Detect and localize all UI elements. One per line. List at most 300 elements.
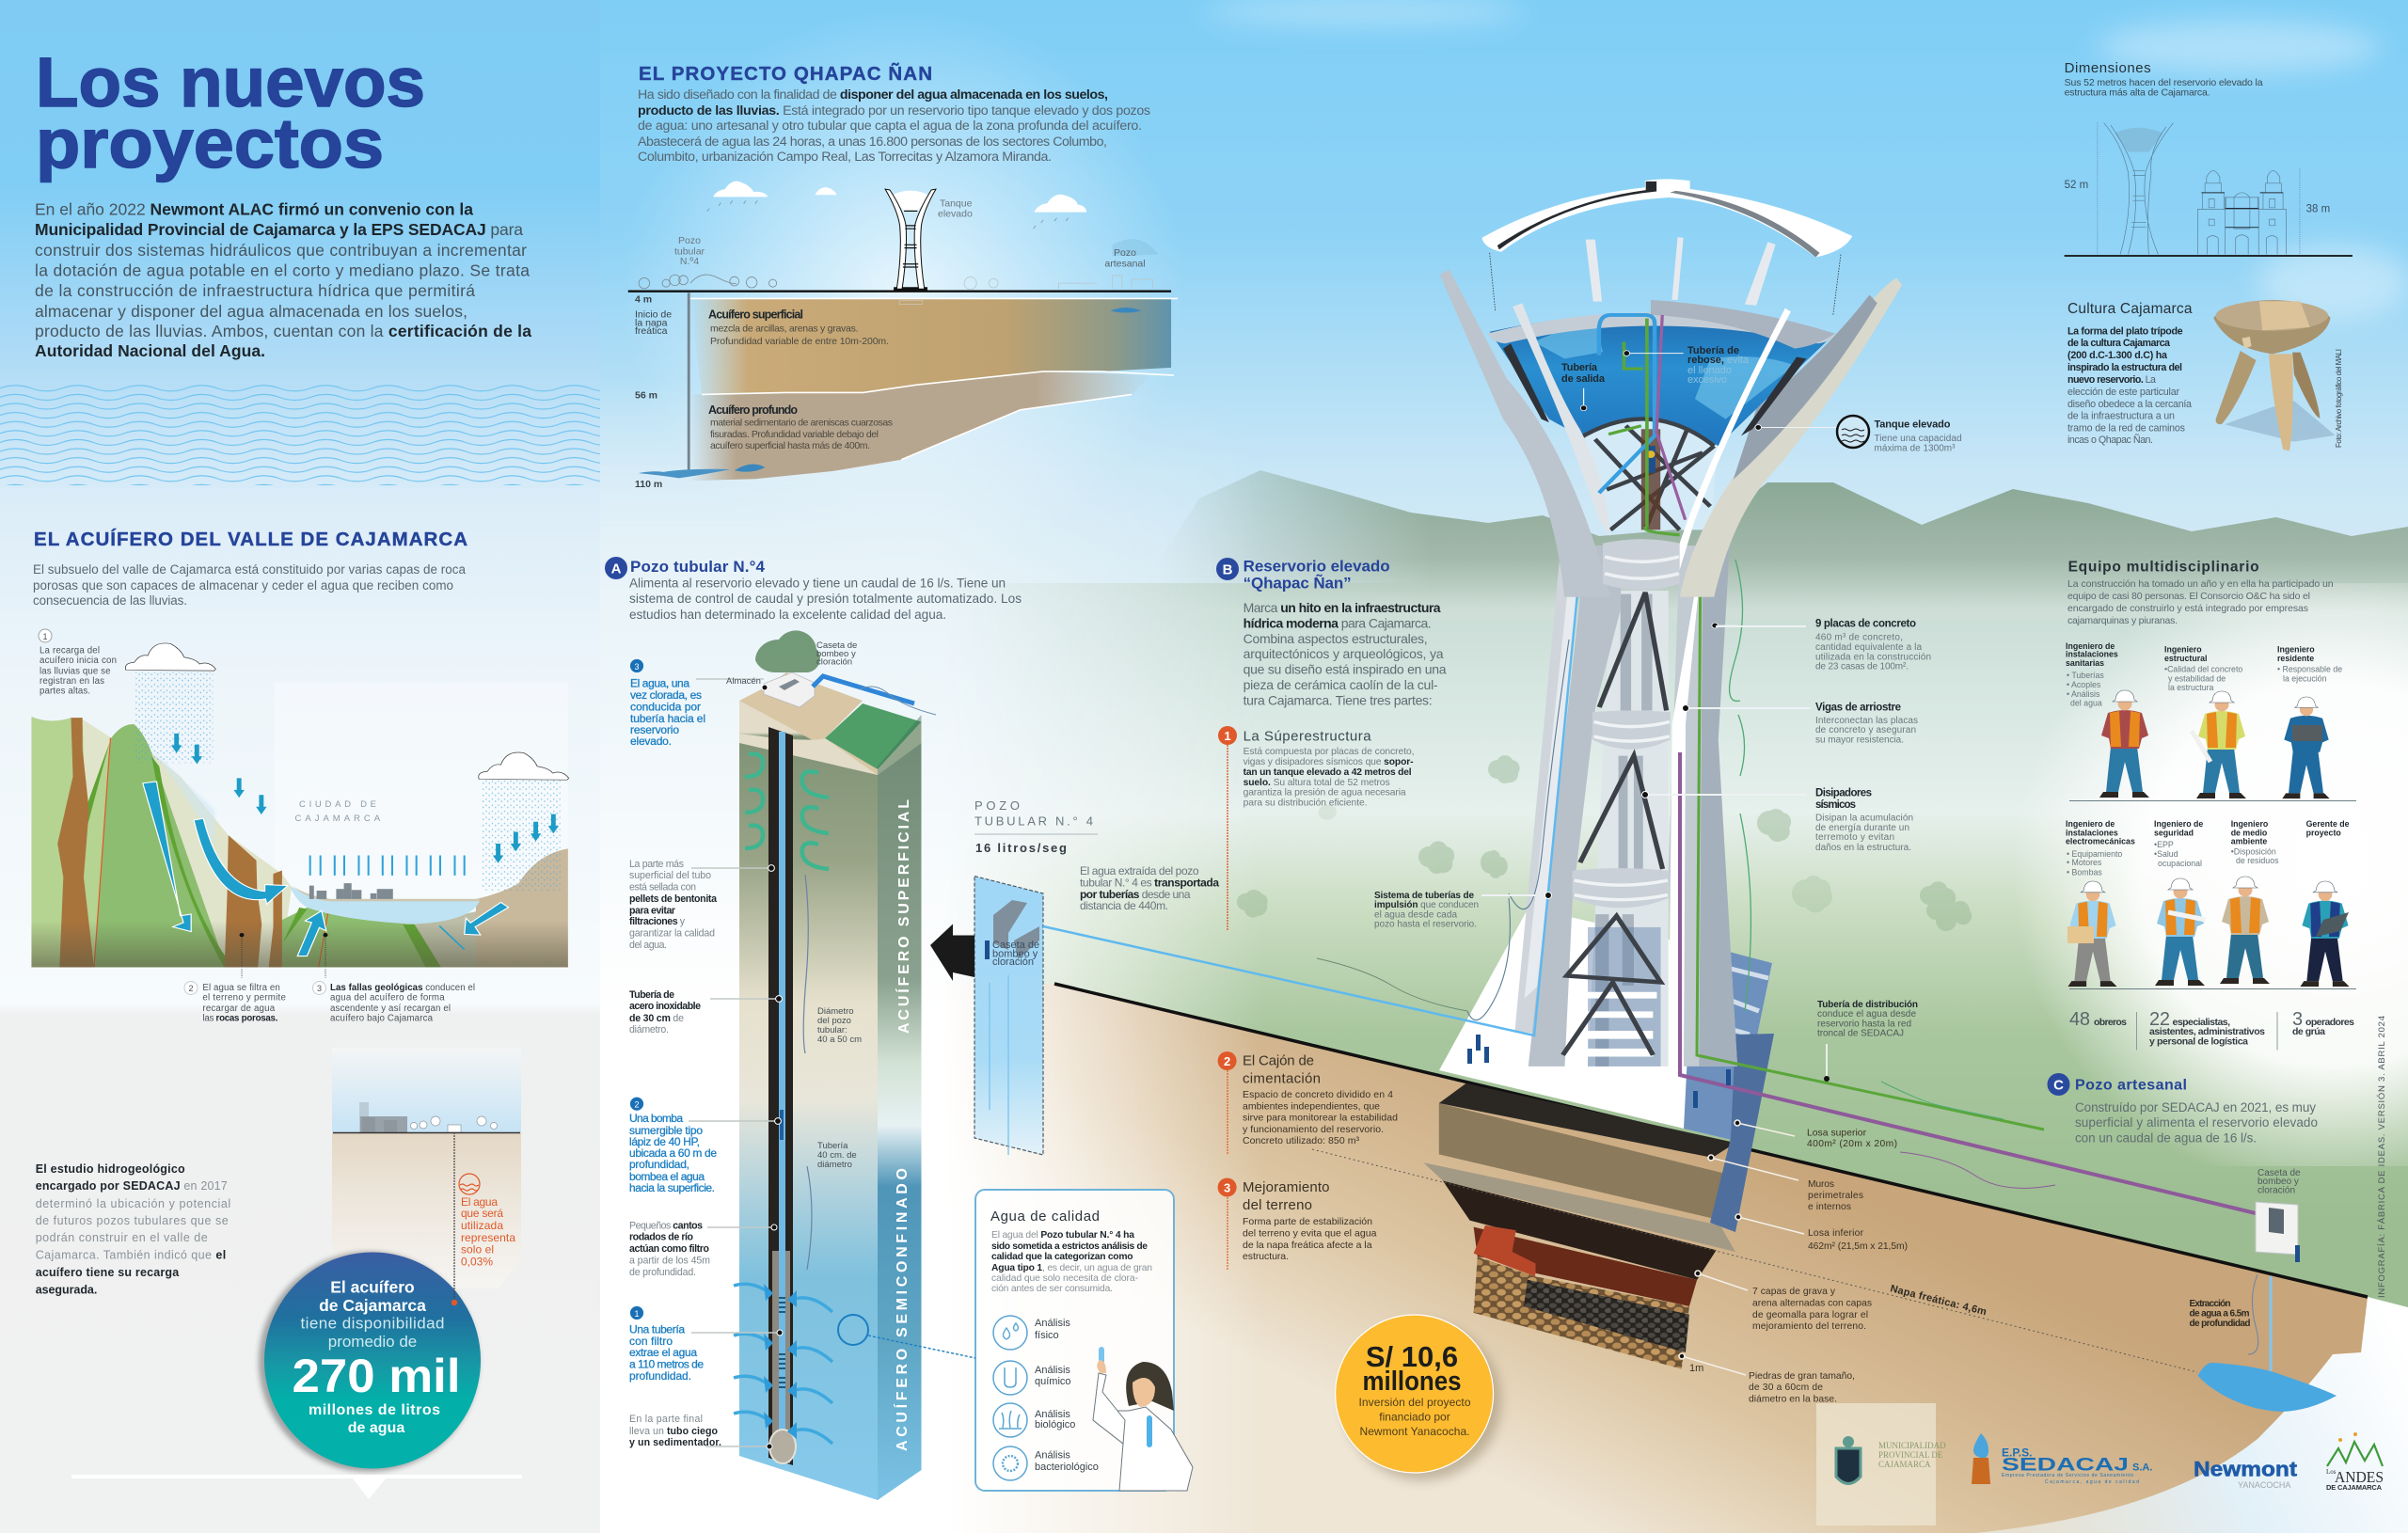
text block: introduction: Municipalidad Provincial de Cajamarca y la EPS SEDACAJ para xyxy=(35,220,523,239)
icon: análisis bacteriológico xyxy=(993,1446,1027,1480)
text block: pozo artesanal: con un caudal de agua de 16 l/s. xyxy=(2075,1130,2257,1146)
text block: introduction: producto de las lluvias. Ambos, cuentan con la certificación de la xyxy=(35,322,531,340)
note: step 2 blue: lápiz de 40 HP, xyxy=(629,1135,700,1148)
figure: ingeniero electromecánicas: • Motores xyxy=(2067,858,2102,867)
stat: 48 obreros: 48 xyxy=(2069,1009,2090,1030)
text: step 3: acuífero bajo Cajamarca xyxy=(330,1014,434,1023)
text block: pozo artesanal: superficial y alimenta el reservorio elevado xyxy=(2075,1115,2318,1130)
callout: tubería de distribución: troncal de SEDACAJ xyxy=(1817,1029,1904,1039)
label: pozo tubular xyxy=(674,235,705,267)
text block: pozo tubular description: sistema de control de caudal y presión totalmente automatizado. Los xyxy=(629,592,1022,606)
text block: pozo tubular description: Alimenta al reservorio elevado y tiene un caudal de 16 l/s. Tiene un xyxy=(629,577,1006,591)
callout: tubería de rebose: rebose, evita xyxy=(1687,355,1750,366)
text: step 2: recargar de agua xyxy=(202,1004,276,1014)
panel: agua de calidad: Agua tipo 1, es decir, un agua de gran xyxy=(991,1263,1152,1273)
callout: tubería de rebose: Tubería de xyxy=(1687,345,1739,356)
logo: sedacaj: Cajamarca, agua de calidad xyxy=(2045,1479,2139,1485)
panel: equipo multidisciplinario: cajamarquinas y piuranas. xyxy=(2067,615,2178,626)
figure: ingeniero de seguridad xyxy=(2154,819,2206,986)
logo: los andes de cajamarca: ANDES xyxy=(2335,1468,2384,1486)
callout: disipadores sísmicos: terremoto y evitan xyxy=(1815,832,1894,843)
photo credit: Foto: Archivo fotográfico del MALI xyxy=(2335,349,2343,448)
logo: sedacaj: SEDACAJ xyxy=(2002,1456,2129,1476)
figure: ingeniero residente: • Responsable de xyxy=(2277,665,2342,674)
illustration: foundation section xyxy=(1423,1083,1735,1369)
illustration: tank and roof xyxy=(1440,179,1902,628)
text: step 1: La recarga del xyxy=(40,646,100,656)
text block: introduction: de la construcción de infraestructura hídrica que permitirá xyxy=(35,281,475,300)
figure: ingeniero electromecánicas: • Equipamiento xyxy=(2067,849,2122,859)
stat: 22 especialistas: 22 xyxy=(2149,1009,2170,1030)
callout: tubería de distribución: reservorio hasta la red xyxy=(1817,1019,1911,1030)
panel: caseta detail card: cloración xyxy=(992,956,1034,968)
badge: step 2: 2 xyxy=(188,984,194,993)
icon: análisis químico xyxy=(993,1361,1027,1395)
depth scale: 110 m xyxy=(635,479,662,490)
text: análisis físico xyxy=(1035,1318,1070,1341)
background: sky and landscape xyxy=(600,0,2408,1533)
note: step 3 blue: tubería hacia el xyxy=(630,712,705,725)
stat: 22 especialistas xyxy=(2149,1009,2265,1047)
text block: introduction xyxy=(35,199,531,360)
text block: proyecto description: de agua: uno artesanal y otro tubular que capta el agua de la zona profunda del acuífero. xyxy=(638,119,1142,134)
layer: acuífero profundo: acuífero superficial hasta más de 400m. xyxy=(710,440,870,451)
logo: municipalidad xyxy=(1816,1403,1946,1525)
panel: agua de calidad: El agua del Pozo tubular N.° 4 ha xyxy=(991,1230,1134,1241)
text block: reservorio description: Combina aspectos estructurales, xyxy=(1244,631,1428,646)
label: tanque elevado: Tanque xyxy=(940,198,973,209)
text: análisis biológico xyxy=(1035,1409,1075,1430)
depth scale: freática xyxy=(635,325,668,337)
panel: dimensiones: 38 m xyxy=(2306,203,2330,214)
logo: newmont: Newmont xyxy=(2194,1458,2298,1481)
layer: acuífero superficial xyxy=(708,308,889,347)
note: stainless pipe: diámetro. xyxy=(629,1024,669,1035)
note: bentonita seal: garantizar la calidad xyxy=(629,928,715,940)
callout: 9 placas de concreto: 9 placas de concreto xyxy=(1815,619,1916,630)
note: sediment trap: En la parte final xyxy=(629,1414,703,1425)
stat: 22 especialistas: asistentes, administrativos xyxy=(2149,1026,2265,1037)
callout: inversión S/ 10,6 millones: millones xyxy=(1362,1367,1462,1397)
callout: vigas de arriostre: Interconectan las placas xyxy=(1815,716,1918,726)
figure: ingeniero de instalaciones sanitarias: del agua xyxy=(2070,698,2102,707)
callout: 0,03%: solo el xyxy=(461,1243,494,1256)
section: 2 el cajón de cimentación: ambientes independientes, que xyxy=(1243,1101,1380,1113)
note: step 3 blue: reservorio xyxy=(630,723,679,736)
callout: inversión S/ 10,6 millones xyxy=(1336,1315,1501,1480)
label: losa inferior: Losa inferior xyxy=(1808,1228,1864,1239)
label: pozo tubular flow: POZO xyxy=(974,798,1020,813)
panel: agua de calidad: Agua de calidad xyxy=(990,1209,1100,1225)
panel: agua de calidad xyxy=(838,1190,1193,1491)
diámetro del pozo: del pozo xyxy=(817,1016,851,1026)
panel: cultura cajamarca: diseño obedece a la cercanía xyxy=(2067,399,2192,410)
section: 1 la superestructura: para su distribución eficiente. xyxy=(1244,798,1368,809)
label: muros: e internos xyxy=(1808,1202,1851,1212)
figure: ingeniero de seguridad: ocupacional xyxy=(2158,859,2202,868)
text: step 1: registran en las xyxy=(40,676,104,687)
figure: ingeniero de instalaciones sanitarias: Ingeniero de xyxy=(2066,641,2115,651)
label: losa superior: 400m² (20m x 20m) xyxy=(1807,1139,1897,1149)
note: stainless pipe: Tubería de xyxy=(629,989,674,1001)
text block: introduction: construir dos sistemas hidráulicos que contribuyan a incrementar xyxy=(35,241,527,260)
label: piedras: de 30 a 60cm de xyxy=(1749,1383,1823,1393)
note: step 2 blue: hacia la superficie. xyxy=(629,1181,715,1194)
section: 1 la superestructura: La Súperestructura xyxy=(1244,728,1371,744)
text block: pozo tubular description xyxy=(629,577,1022,622)
label: extracción: Extracción xyxy=(2190,1299,2231,1309)
section: 1 la superestructura: 1 xyxy=(1224,729,1231,743)
icon: red water globe xyxy=(459,1174,480,1194)
note: bentonita seal: del agua. xyxy=(629,940,667,951)
label: 1m: 1m xyxy=(1689,1363,1703,1374)
callout: tubería de rebose: el llenado xyxy=(1687,365,1732,376)
panel: cultura cajamarca: nuevo reservorio. La xyxy=(2067,374,2156,386)
panel: equipo multidisciplinario: Equipo multidisciplinario xyxy=(2068,560,2259,576)
note: step 1 blue: con filtro xyxy=(629,1335,673,1348)
label: capas de grava: arena alternadas con capas xyxy=(1752,1298,1872,1309)
note: step 2 blue: ubicada a 60 m de xyxy=(629,1146,717,1160)
callout: disipadores sísmicos: daños en la estructura. xyxy=(1815,843,1911,853)
callout: 270 mil circle: promedio de xyxy=(328,1333,417,1351)
callout: vigas de arriostre xyxy=(1815,703,1918,746)
note: bentonita seal: La parte más xyxy=(629,859,684,870)
label: muros: Muros xyxy=(1808,1179,1834,1190)
callout: tubería de salida: de salida xyxy=(1561,373,1606,385)
label: losa superior xyxy=(1807,1128,1897,1149)
icon: análisis biológico xyxy=(993,1403,1027,1437)
figure: ingeniero de instalaciones sanitarias: • Acoples xyxy=(2067,680,2101,689)
callout: sistema de tuberías de impulsión: Sistema de tuberías de xyxy=(1374,891,1474,901)
text: step 1: las lluvias que se xyxy=(40,666,111,676)
layer: acuífero profundo: material sedimentario de areniscas cuarzosas xyxy=(710,418,893,429)
note: step 2 blue xyxy=(629,1098,717,1194)
section: 2 el cajón de cimentación: 2 xyxy=(1224,1054,1230,1068)
label: losa superior: Losa superior xyxy=(1807,1128,1867,1138)
title xyxy=(36,43,425,182)
chart: project cross-section with tower and aquifers xyxy=(628,182,1178,481)
label: piedras: Piedras de gran tamaño, xyxy=(1749,1371,1855,1382)
text: step 3: ascendente y así recargan el xyxy=(330,1004,451,1014)
panel: agua de calidad: sido sometida a estrictos análisis de xyxy=(991,1241,1148,1252)
callout lines xyxy=(689,679,779,1446)
note: step 3 blue: conducida por xyxy=(630,700,701,713)
logo: los andes de cajamarca xyxy=(2326,1432,2384,1492)
logo: sedacaj xyxy=(1972,1433,2152,1485)
figure: ingeniero estructural: •Calidad del concreto xyxy=(2164,665,2242,674)
section: 2 el cajón de cimentación xyxy=(1218,1051,1398,1270)
logo: municipalidad: CAJAMARCA xyxy=(1878,1460,1931,1469)
figure: ingeniero de instalaciones sanitarias: instalaciones xyxy=(2066,650,2118,659)
text: step 1: acuífero inicia con xyxy=(40,656,117,666)
note: river stones: actúan como filtro xyxy=(629,1243,710,1255)
note: river stones: rodados de río xyxy=(629,1232,694,1243)
pointers: shaft callouts xyxy=(1481,626,1811,899)
text block: acuífero description xyxy=(33,562,467,608)
callout: inversión S/ 10,6 millones: S/ 10,6 xyxy=(1366,1340,1458,1373)
label: extracción: de profundidad xyxy=(2190,1319,2250,1329)
section: 3 mejoramiento del terreno: Forma parte de estabilización xyxy=(1243,1216,1372,1227)
figure: ingeniero de instalaciones sanitarias: • Tuberías xyxy=(2067,671,2104,680)
note: step 2 blue: 2 xyxy=(634,1100,640,1110)
callout: tubería de salida: Tubería xyxy=(1561,362,1598,373)
label: pozo tubular flow xyxy=(974,798,1098,855)
section: 3 mejoramiento del terreno: del terreno y evita que el agua xyxy=(1243,1228,1377,1240)
text: análisis físico: físico xyxy=(1035,1330,1059,1341)
figure: ingeniero electromecánicas: • Bombas xyxy=(2067,867,2102,877)
callout: 0,03%: representa xyxy=(461,1231,515,1244)
figure: ingeniero residente xyxy=(2277,644,2342,798)
callout: 0,03%: El agua xyxy=(461,1195,498,1209)
text block: estudio hidrogeológico: determinó la ubicación y potencial xyxy=(36,1197,230,1210)
figure: ingeniero de instalaciones sanitarias: • Análisis xyxy=(2067,689,2100,699)
callout: tanque elevado: máxima de 1300m³ xyxy=(1874,444,1956,453)
text block: estudio hidrogeológico: Cajamarca. También indicó que el xyxy=(36,1249,226,1262)
panel: dimensiones: estructura más alta de Cajamarca. xyxy=(2065,87,2210,99)
panel: agua de calidad: ción antes de ser consumida. xyxy=(991,1284,1113,1294)
heading: acuífero del valle: EL ACUÍFERO DEL VALLE DE CAJAMARCA xyxy=(34,529,467,550)
note: bentonita seal: para evitar xyxy=(629,905,675,916)
section: 1 la superestructura: tan un tanque elevado a 42 metros del xyxy=(1244,767,1412,778)
text block: transport description xyxy=(1080,864,1219,912)
heading: C pozo artesanal: Pozo artesanal xyxy=(2075,1078,2187,1094)
callout: 0,03%: que será xyxy=(461,1207,503,1220)
text: step 2: El agua se filtra en xyxy=(202,983,280,993)
callout: vigas de arriostre: de concreto y aseguran xyxy=(1815,725,1916,735)
city label: CIUDAD DE xyxy=(299,799,376,810)
text block: reservorio description: hídrica moderna para Cajamarca. xyxy=(1244,616,1432,631)
section: 3 mejoramiento del terreno: estructura. xyxy=(1243,1251,1289,1262)
stat: 3 operadores: operadores xyxy=(2305,1017,2354,1028)
heading: B reservorio elevado: B xyxy=(1223,562,1233,577)
section: 1 la superestructura xyxy=(1218,726,1415,930)
text: step 1 xyxy=(40,646,117,696)
text: step 2: el terreno y permite xyxy=(202,993,286,1004)
text block: reservorio description: pieza de cerámica caolín de la cul- xyxy=(1244,677,1438,692)
section: 3 mejoramiento del terreno: del terreno xyxy=(1243,1197,1312,1213)
badge: step 1 xyxy=(39,629,52,642)
badge: step 3: 3 xyxy=(317,984,322,993)
callout: vigas de arriostre: su mayor resistencia. xyxy=(1815,735,1904,746)
pointers: foundation callouts xyxy=(1679,1120,1804,1375)
callout: 270 mil circle: millones de litros xyxy=(309,1402,440,1418)
text block: estudio hidrogeológico: El estudio hidrogeológico xyxy=(36,1162,185,1176)
note: river stones: de profundidad. xyxy=(629,1267,696,1278)
baseline xyxy=(2065,255,2353,257)
depth scale: Inicio de xyxy=(635,308,672,320)
heading: B reservorio elevado: Reservorio elevado xyxy=(1244,557,1390,576)
note: step 2 blue: profundidad, xyxy=(629,1158,689,1171)
callout: 270 mil circle: de Cajamarca xyxy=(319,1296,426,1315)
panel: cultura cajamarca: elección de este particular xyxy=(2067,387,2179,398)
callout: inversión S/ 10,6 millones: Inversión del proyecto xyxy=(1358,1396,1471,1409)
note: river stones: Pequeños cantos xyxy=(629,1221,703,1232)
section: 2 el cajón de cimentación: sirve para monitorear la estabilidad xyxy=(1243,1113,1398,1124)
label: pozo artesanal: Pozo xyxy=(1114,247,1136,259)
water table line and label: Napa freática: 4,6m xyxy=(1889,1283,1988,1318)
heading: C pozo artesanal xyxy=(2047,1073,2187,1096)
callout: tanque elevado xyxy=(1837,416,1962,453)
panel: dimensiones: Sus 52 metros hacen del reservorio elevado la xyxy=(2065,77,2263,88)
label: capas de grava: 7 capas de grava y xyxy=(1752,1287,1836,1297)
diámetro del pozo: tubular: xyxy=(817,1025,848,1035)
panel: agua de calidad: calidad que solo necesita de clora- xyxy=(991,1273,1138,1284)
callout: disipadores sísmicos: Disipadores xyxy=(1815,788,1872,799)
section: 3 mejoramiento del terreno: Mejoramiento xyxy=(1243,1179,1330,1195)
callout: 9 placas de concreto: cantidad equivalente a la xyxy=(1815,642,1922,653)
note: stainless pipe xyxy=(629,989,701,1035)
figure: ingeniero de medio ambiente: Ingeniero xyxy=(2231,819,2269,829)
callout: 270 mil circle: 270 mil xyxy=(292,1350,461,1402)
layer: acuífero profundo xyxy=(708,403,893,451)
figure: ingeniero estructural: estructural xyxy=(2164,654,2207,663)
label: caseta: cloración xyxy=(2258,1185,2295,1196)
icon: análisis físico xyxy=(993,1316,1027,1350)
text: step 3: Las fallas geológicas conducen el xyxy=(330,983,475,993)
callout: disipadores sísmicos xyxy=(1815,788,1913,853)
callout: 270 mil circle xyxy=(259,1132,481,1472)
almacén label: Almacén xyxy=(726,676,761,687)
panel: left intro column xyxy=(0,0,600,1533)
water table line and label xyxy=(1312,1149,2197,1372)
note: sediment trap xyxy=(629,1414,721,1448)
note: step 1 blue: Una tubería xyxy=(629,1323,685,1336)
label: muros: perimetrales xyxy=(1808,1191,1863,1201)
callout: tubería de rebose xyxy=(1687,345,1750,386)
callout: 9 placas de concreto xyxy=(1815,619,1931,672)
section: 1 la superestructura: Está compuesta por placas de concreto, xyxy=(1244,747,1415,757)
figure: ingeniero residente: residente xyxy=(2277,654,2314,663)
illustration: artisanal well xyxy=(2190,1168,2337,1412)
tubería 40 cm: 40 cm. de xyxy=(817,1150,857,1161)
callout: tanque elevado: Tanque elevado xyxy=(1874,419,1951,431)
text block: pozo artesanal xyxy=(2075,1100,2318,1146)
panel: dimensiones xyxy=(2065,60,2353,256)
callout: disipadores sísmicos: de energía durante un xyxy=(1815,823,1909,833)
text block: proyecto description: Ha sido diseñado con la finalidad de disponer del agua almacenada en los suelos, xyxy=(638,87,1108,103)
text block: introduction: En el año 2022 Newmont ALAC firmó un convenio con la xyxy=(35,199,473,218)
title: proyectos xyxy=(36,104,384,182)
text block: estudio hidrogeológico: de futuros pozos tubulares que se xyxy=(36,1214,229,1227)
text block: estudio hidrogeológico: acuífero tiene su recarga xyxy=(36,1266,180,1279)
section: 3 mejoramiento del terreno: de la napa freática afecte a la xyxy=(1243,1240,1372,1251)
figure: ingeniero de medio ambiente: de residuos xyxy=(2236,856,2279,865)
text block: proyecto description: Abastecerá de agua las 24 horas, a unas 16.800 personas de los sectores Columbo, xyxy=(638,134,1107,150)
text: step 2 xyxy=(202,983,286,1023)
figure: ingeniero electromecánicas: Ingeniero de xyxy=(2066,819,2115,829)
text: análisis químico: Análisis xyxy=(1035,1365,1070,1376)
chart: mini section of the aquifer xyxy=(332,1048,521,1303)
callout: sistema de tuberías de impulsión: impulsión que conducen xyxy=(1374,900,1479,910)
callout: 0,03%: utilizada xyxy=(461,1219,503,1232)
layer: acuífero superficial: Profundidad variable de entre 10m-200m. xyxy=(710,336,889,347)
layer: acuífero profundo: Acuífero profundo xyxy=(708,403,798,417)
section: 3 mejoramiento del terreno xyxy=(1218,1177,1377,1262)
text: análisis biológico: biológico xyxy=(1035,1419,1075,1430)
label: caseta xyxy=(2258,1168,2301,1196)
text: step 1: partes altas. xyxy=(40,686,90,696)
depth scale xyxy=(635,293,672,490)
labels: project section xyxy=(635,198,1146,490)
label: pozo tubular: N.º4 xyxy=(680,256,699,267)
logo: newmont xyxy=(2194,1458,2298,1490)
heading: B reservorio elevado: “Qhapac Ñan” xyxy=(1244,574,1352,593)
callout: 270 mil circle: tiene disponibilidad xyxy=(301,1315,444,1333)
panel: agua de calidad: calidad que la categorizan como xyxy=(991,1252,1133,1262)
section: 1 la superestructura: garantiza la presión de agua necesaria xyxy=(1244,788,1406,798)
text block: proyecto description xyxy=(638,87,1150,165)
panel: dimensiones: Dimensiones xyxy=(2065,60,2151,76)
diámetro del pozo: 40 a 50 cm xyxy=(817,1035,862,1045)
note: step 2 blue: sumergible tipo xyxy=(629,1124,703,1137)
text: step 2: las rocas porosas. xyxy=(202,1014,278,1023)
figure: ingeniero de seguridad: Ingeniero de xyxy=(2154,819,2203,829)
note: step 3 blue: El agua, una xyxy=(630,677,689,690)
label: extracción xyxy=(2190,1299,2250,1329)
figure: ingeniero electromecánicas: instalaciones xyxy=(2066,828,2118,837)
label: tanque elevado xyxy=(938,198,973,220)
badge: step 3 xyxy=(312,982,325,995)
depth scale: la napa xyxy=(635,317,668,328)
figure: ingeniero electromecánicas xyxy=(2066,819,2135,987)
note: step 2 blue: bombea el agua xyxy=(629,1170,705,1183)
text block: estudio hidrogeológico: asegurada. xyxy=(36,1283,97,1296)
text: análisis bacteriológico: Análisis xyxy=(1035,1450,1070,1462)
callout: 9 placas de concreto: de 23 casas de 100m². xyxy=(1815,662,1909,672)
pointer under the circle xyxy=(71,1475,522,1499)
panel: cultura cajamarca: La forma del plato trípode xyxy=(2067,326,2183,338)
figure: ingeniero de medio ambiente: de medio xyxy=(2231,828,2268,837)
heading: A pozo tubular: Pozo tubular N.°4 xyxy=(630,558,766,576)
note: bentonita seal: superficial del tubo xyxy=(629,870,711,881)
text: análisis químico xyxy=(1035,1365,1071,1387)
stat: 3 operadores: de grúa xyxy=(2292,1026,2325,1037)
section: 3 mejoramiento del terreno: 3 xyxy=(1224,1181,1230,1194)
credit: vertical: INFOGRAFÍA: FÁBRICA DE IDEAS. VERSIÓN 3. ABRIL 2024 xyxy=(2377,1016,2387,1298)
text block: acuífero description: porosas que son capaces de almacenar y ceder el agua que reciben como xyxy=(33,578,453,593)
logo: newmont: YANACOCHA xyxy=(2238,1480,2290,1490)
title: Los nuevos xyxy=(36,43,425,121)
labels on the well xyxy=(726,640,862,1170)
callout: disipadores sísmicos: Disipan la acumulación xyxy=(1815,814,1913,824)
heading: B reservorio elevado xyxy=(1216,557,1390,593)
text: análisis biológico: Análisis xyxy=(1035,1409,1070,1420)
note: step 2 blue: Una bomba xyxy=(629,1112,683,1125)
heading: proyecto: EL PROYECTO QHAPAC ÑAN xyxy=(639,63,932,85)
section: 2 el cajón de cimentación: Concreto utilizado: 850 m³ xyxy=(1243,1135,1360,1146)
city label xyxy=(295,799,381,824)
depth scale: 4 m xyxy=(635,293,652,305)
callout: sistema de tuberías de impulsión xyxy=(1374,891,1479,930)
panel: caseta detail card xyxy=(974,877,1043,1155)
stat: 48 obreros: obreros xyxy=(2094,1017,2127,1028)
figure: ingeniero residente: la ejecución xyxy=(2283,673,2327,683)
tubería 40 cm: diámetro xyxy=(817,1160,852,1170)
illustration: tripod plate xyxy=(2213,300,2336,451)
logo: sedacaj: E.P.S. xyxy=(2002,1446,2032,1460)
text block: transport description: por tuberías desde una xyxy=(1080,888,1191,901)
label: pozo artesanal: artesanal xyxy=(1104,259,1146,270)
depth scale: 56 m xyxy=(635,389,657,401)
callout: sistema de tuberías de impulsión: el agua desde cada xyxy=(1374,910,1457,921)
logo: sedacaj: S.A. xyxy=(2132,1462,2152,1474)
city label: CAJAMARCA xyxy=(295,814,381,824)
layer: acuífero superficial: mezcla de arcillas, arenas y gravas. xyxy=(710,324,858,335)
note: sediment trap: y un sedimentador. xyxy=(629,1437,721,1448)
heading: A pozo tubular: A xyxy=(611,561,622,577)
ground line and slab xyxy=(1054,984,2368,1297)
illustration: scientist xyxy=(1093,1347,1193,1491)
